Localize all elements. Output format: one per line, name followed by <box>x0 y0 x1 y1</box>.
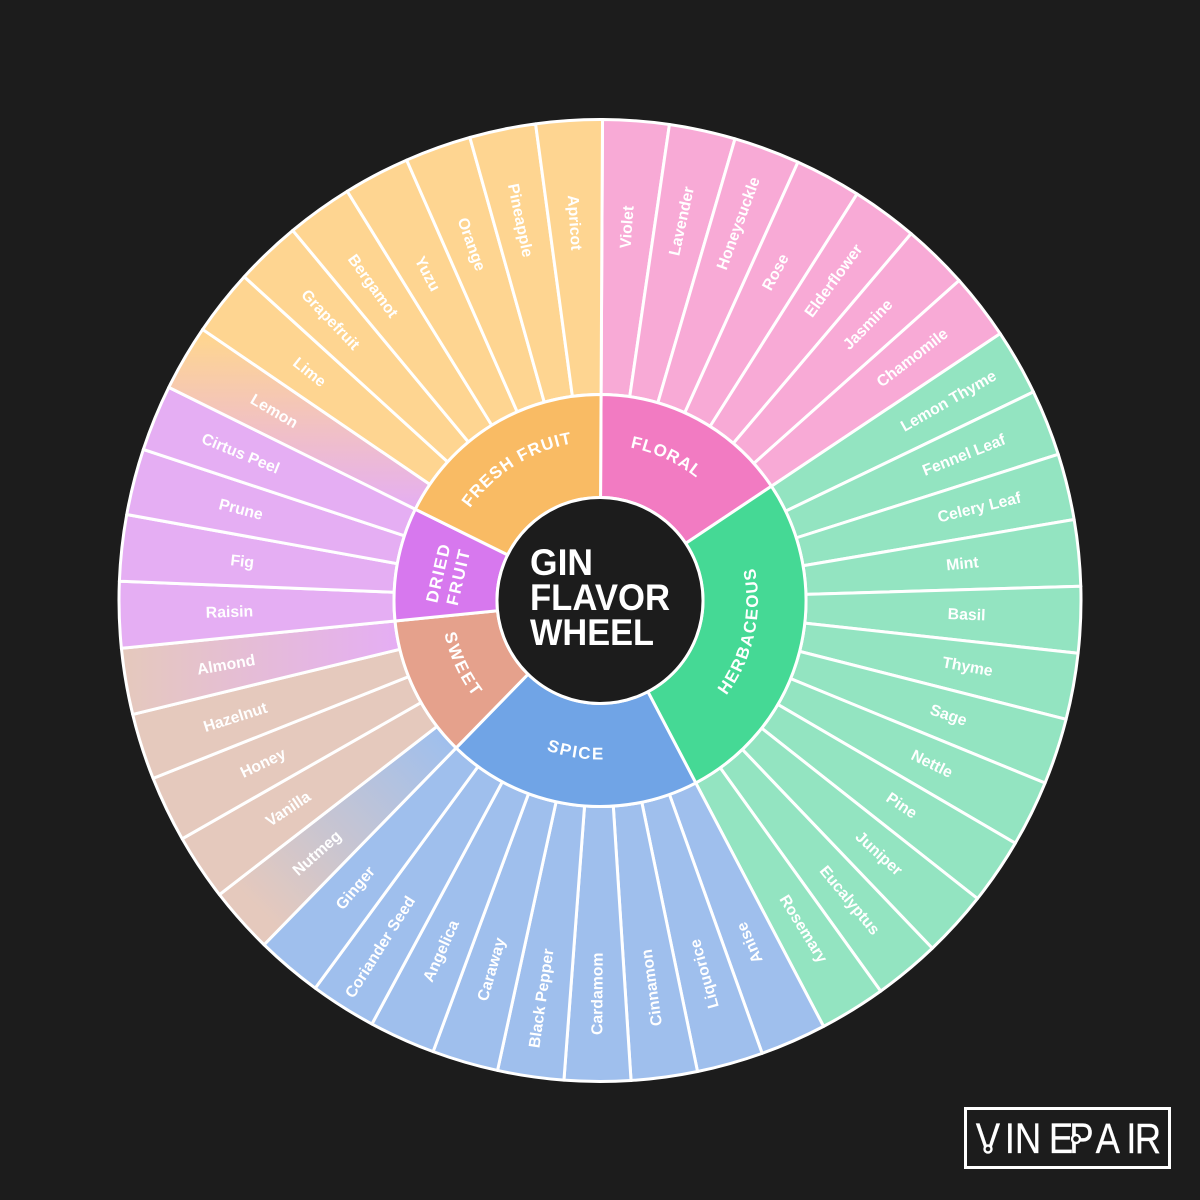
segment: Black Pepper: Black Pepper <box>526 948 558 1049</box>
segment: Yuzu <box>347 159 534 434</box>
segment: Nutmeg <box>219 725 456 946</box>
category: sweet <box>394 612 528 748</box>
category: floral: FLORAL <box>631 436 698 478</box>
segment: Eucalyptus: Eucalyptus <box>816 863 883 939</box>
segment: Pineapple: Pineapple <box>504 182 536 259</box>
segment: Bergamot: Bergamot <box>344 251 401 322</box>
segment: Lemon Thyme <box>762 333 1034 528</box>
flavor wheel <box>118 118 1082 1083</box>
category: fresh fruit <box>414 393 603 556</box>
segment: Pine: Pine <box>883 790 920 823</box>
segment: Honey: Honey <box>238 745 289 782</box>
outer ring: sweet flavors <box>120 620 457 946</box>
category: fresh fruit: FRESH FRUIT <box>461 432 570 508</box>
segment: Lavender <box>611 123 735 407</box>
segment: Violet <box>582 118 670 398</box>
segment: Thyme <box>796 604 1079 720</box>
category: dried fruit <box>394 509 508 622</box>
segment: Chamomile <box>742 280 1001 501</box>
segment: Cinnamon: Cinnamon <box>639 948 666 1027</box>
segment: Vanilla: Vanilla <box>263 788 314 830</box>
segment: Honey <box>152 659 429 839</box>
segment: Raisin <box>118 573 396 648</box>
segment: Apricot: Apricot <box>564 195 584 252</box>
category: spice <box>456 676 696 808</box>
segment: Sage <box>785 633 1067 783</box>
segment: Angelica: Angelica <box>420 918 463 985</box>
segment: Nutmeg: Nutmeg <box>290 828 345 880</box>
segment: Fig: Fig <box>229 552 255 572</box>
segment: Liquorice <box>623 789 762 1073</box>
segment: Pine <box>751 689 1016 899</box>
segment: Anise <box>652 775 824 1054</box>
segment: Hazelnut <box>132 631 414 779</box>
category: dried fruit: FRUIT <box>443 546 474 607</box>
segment: Jasmine <box>720 233 960 477</box>
segment: Ginger <box>263 736 493 989</box>
segment: Hazelnut: Hazelnut <box>202 700 270 736</box>
outer ring: spice flavors <box>263 735 826 1083</box>
segment: Lavender: Lavender <box>666 185 698 257</box>
segment: Angelica <box>371 774 546 1053</box>
segment: Celery Leaf: Celery Leaf <box>936 489 1024 526</box>
segment: Coriander Seed <box>315 756 519 1025</box>
segment: Lemon Thyme: Lemon Thyme <box>898 368 1000 435</box>
segment: Vanilla <box>181 687 448 895</box>
segment: Nettle: Nettle <box>908 747 955 782</box>
segment: Basil <box>804 575 1082 653</box>
title: FLAVOR <box>530 577 670 618</box>
segment: Lemon <box>168 329 431 509</box>
segment: Raisin: Raisin <box>206 603 253 622</box>
segment: Bergamot <box>292 190 507 453</box>
outer ring: fresh fruit flavors <box>168 116 622 510</box>
segment: Prune <box>126 449 409 582</box>
segment: Fennel Leaf: Fennel Leaf <box>920 431 1009 480</box>
segment: Chamomile: Chamomile <box>874 325 952 391</box>
segment: Coriander Seed: Coriander Seed <box>342 893 419 1001</box>
segment: Almond: Almond <box>196 652 257 679</box>
segment: Liquorice: Liquorice <box>687 937 723 1010</box>
segment: Rosemary <box>679 758 881 1027</box>
segment: Violet: Violet <box>617 204 638 249</box>
segment: Rose <box>668 161 858 435</box>
segment: Cirtus Peel: Cirtus Peel <box>199 431 282 478</box>
segment: Ginger: Ginger <box>333 863 379 913</box>
segment: Jasmine: Jasmine <box>840 296 897 353</box>
segment: Elderflower <box>695 193 912 455</box>
segment: Cinnamon <box>594 800 698 1082</box>
segment: Lemon: Lemon <box>247 391 300 432</box>
segment: Lime <box>202 276 460 499</box>
outer ring: dried fruit flavors <box>118 387 423 650</box>
segment: Anise: Anise <box>734 919 767 966</box>
segment: Juniper: Juniper <box>852 828 905 879</box>
category: floral <box>602 393 772 542</box>
segment: Black Pepper <box>497 799 604 1081</box>
segment: Lime: Lime <box>289 355 329 391</box>
segment: Orange: Orange <box>454 216 488 274</box>
segment: Rosemary: Rosemary <box>776 892 830 966</box>
segment: Honeysuckle: Honeysuckle <box>714 175 764 272</box>
segment: Celery Leaf <box>792 454 1075 584</box>
segment: Mint <box>801 519 1082 613</box>
logo: VinePair: VINEPAIR <box>976 1115 1161 1163</box>
segment: Grapefruit <box>243 230 482 475</box>
segment: Sage: Sage <box>928 702 969 730</box>
segment: Rose: Rose <box>759 251 793 293</box>
category: spice: SPICE <box>548 740 603 760</box>
center hub <box>496 497 704 704</box>
segment: Fennel Leaf <box>779 391 1059 556</box>
segment: Caraway: Caraway <box>475 936 509 1003</box>
outer ring: floral flavors <box>581 118 1002 503</box>
title: WHEEL <box>530 612 654 653</box>
segment: Honeysuckle <box>640 138 798 419</box>
title <box>530 542 670 653</box>
category: herbaceous <box>650 486 808 784</box>
segment: Almond <box>121 620 400 716</box>
category: dried fruit: DRIED <box>423 541 455 605</box>
category: sweet: SWEET <box>445 632 483 694</box>
segment: Caraway <box>433 788 575 1072</box>
segment: Cirtus Peel <box>142 387 423 554</box>
segment: Pineapple <box>470 123 591 406</box>
segment: Mint: Mint <box>945 554 980 574</box>
segment: Thyme: Thyme <box>941 654 994 680</box>
segment: Apricot <box>535 118 620 398</box>
segment: Prune: Prune <box>217 496 265 524</box>
title: GIN <box>530 542 593 583</box>
outer ring: herbaceous flavors <box>678 331 1083 1029</box>
category: herbaceous: HERBACEOUS <box>717 569 758 695</box>
segment: Yuzu: Yuzu <box>411 254 443 294</box>
segment: Grapefruit: Grapefruit <box>298 287 363 354</box>
segment: Cardamom: Cardamom <box>589 952 607 1035</box>
segment: Juniper <box>729 714 978 949</box>
segment: Orange <box>406 136 562 418</box>
segment: Elderflower: Elderflower <box>802 241 866 321</box>
segment: Nettle <box>769 661 1046 844</box>
segment: Eucalyptus <box>705 737 933 992</box>
segment: Cardamom <box>564 806 632 1082</box>
segment: Basil: Basil <box>947 606 986 624</box>
segment: Fig <box>118 514 399 611</box>
